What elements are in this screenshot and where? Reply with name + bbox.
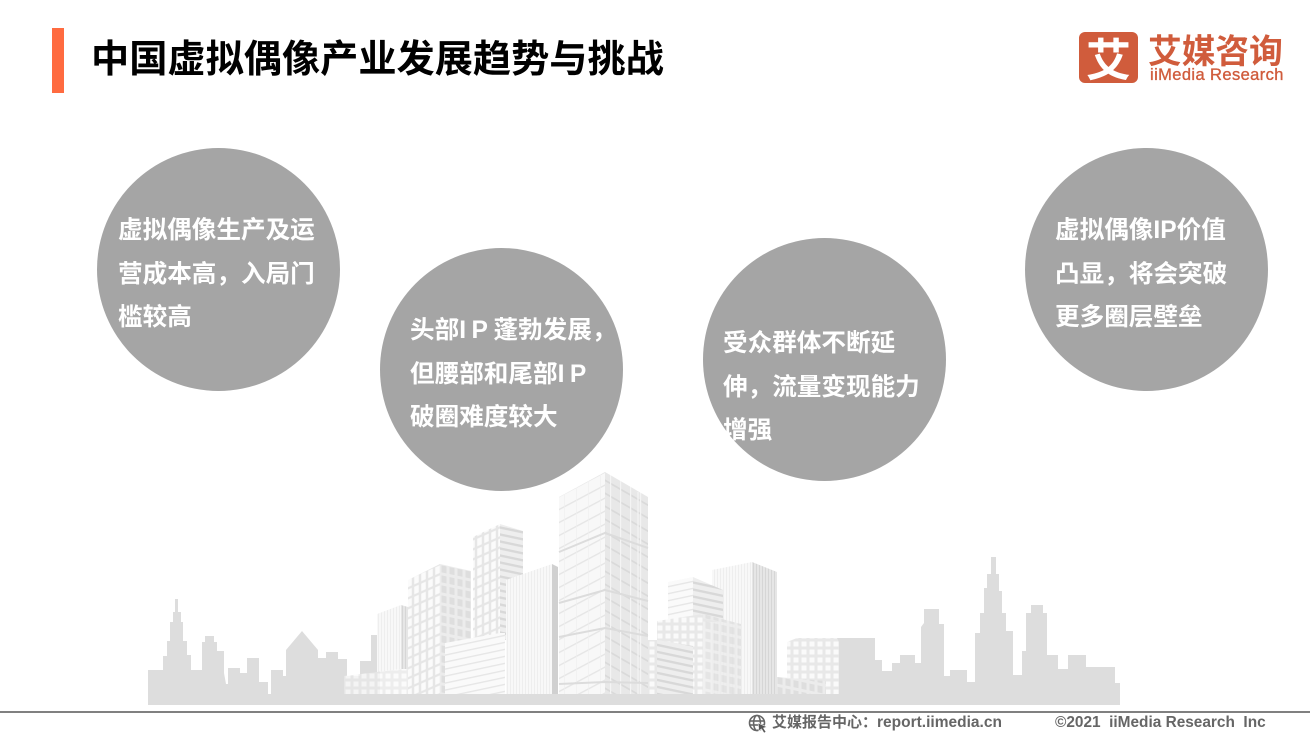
text: circle 2: 头部IP蓬勃发展， — [410, 317, 616, 344]
panel: circle 2 — [380, 248, 623, 491]
text: circle 3: 伸，流量变现能力 — [723, 374, 920, 400]
building: low left block — [344, 669, 408, 694]
text: circle 1: 虚拟偶像生产及运 — [118, 217, 315, 244]
building: grid tower — [408, 564, 471, 694]
building: rear tower — [473, 524, 523, 640]
panel: circle 4 — [1025, 148, 1268, 391]
building: small right block — [777, 677, 826, 694]
building: far right block — [787, 638, 839, 694]
building: right top block — [668, 577, 723, 622]
building: right mid block — [657, 614, 741, 694]
logo: iiMedia Research — [1079, 32, 1284, 84]
text: circle 4: 凸显，将会突破 — [1055, 260, 1227, 288]
city buildings — [344, 472, 839, 694]
building: white low block — [445, 633, 505, 694]
building: small left tower — [377, 605, 408, 672]
footer line — [0, 711, 1310, 713]
panel: circle 3 — [703, 238, 946, 481]
text: circle 3: 增强 — [723, 417, 772, 444]
text: circle 2: 但腰部和尾部IP — [410, 360, 592, 388]
skyline silhouette — [148, 557, 1120, 705]
building: striped tower — [506, 564, 558, 694]
text: circle 4: 更多圈层壁垒 — [1055, 304, 1203, 331]
building: low striped block — [648, 640, 693, 694]
building: main tower — [559, 472, 648, 694]
icon: globe with cursor — [748, 714, 766, 732]
text: circle 2: 破圈难度较大 — [410, 404, 558, 431]
text: circle 1: 槛较高 — [118, 304, 192, 331]
title: 中国虚拟偶像产业发展趋势与挑战 — [91, 38, 664, 81]
text: circle 4 — [1055, 217, 1227, 331]
text: circle 2 — [410, 316, 616, 431]
footer copyright: ©2021 iiMedia Research Inc — [1055, 714, 1266, 731]
footer source: 艾媒报告中心：report.iimedia.cn — [772, 714, 1002, 731]
text: circle 1 — [118, 216, 315, 331]
text: circle 3 — [723, 330, 920, 444]
text: circle 4: 虚拟偶像IP价值 — [1055, 217, 1226, 244]
building: right vertical tower — [712, 562, 777, 694]
logo chinese name: 艾媒咨询 — [1148, 33, 1283, 71]
title accent bar — [52, 28, 64, 93]
text: circle 1: 营成本高，入局门 — [118, 260, 315, 288]
text: circle 3: 受众群体不断延 — [723, 330, 895, 357]
panel: circle 1 — [97, 148, 340, 391]
logo english name: iiMedia Research — [1150, 66, 1284, 84]
